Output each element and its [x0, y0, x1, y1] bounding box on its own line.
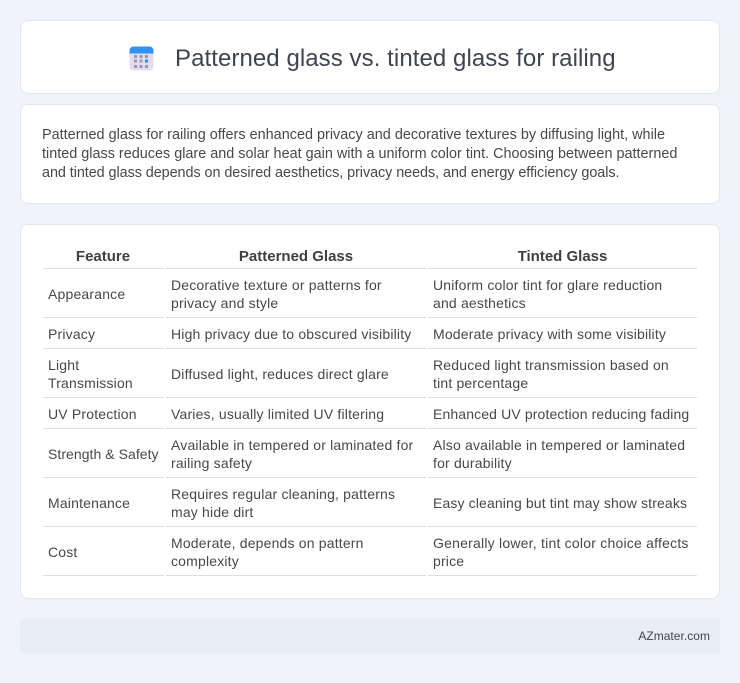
text: High privacy due to obscured visibility [171, 326, 411, 342]
text: Strength & Safety [48, 446, 159, 462]
text: for durability [433, 455, 512, 471]
text: tint percentage [433, 375, 528, 391]
row: privacy [48, 326, 666, 342]
text: price [433, 553, 464, 569]
text: Tinted Glass [518, 248, 607, 265]
text: Privacy [48, 326, 95, 342]
text: may hide dirt [171, 504, 254, 520]
row: maintenance [48, 486, 687, 520]
text: Feature [76, 248, 130, 265]
comparison table [43, 248, 697, 576]
intro paragraph [42, 126, 677, 181]
text: Appearance [48, 286, 125, 302]
text: and aesthetics [433, 295, 526, 311]
text: UV Protection [48, 406, 137, 422]
text: Also available in tempered or laminated [433, 437, 685, 453]
row: light transmission [48, 357, 669, 391]
text: Uniform color tint for glare reduction [433, 277, 662, 293]
text: Generally lower, tint color choice affects [433, 535, 689, 551]
text: Requires regular cleaning, patterns [171, 486, 395, 502]
text: Moderate privacy with some visibility [433, 326, 666, 342]
text: Available in tempered or laminated for [171, 437, 413, 453]
text: Cost [48, 544, 78, 560]
text: Decorative texture or patterns for [171, 277, 382, 293]
text: Maintenance [48, 495, 130, 511]
text: Transmission [48, 375, 133, 391]
row: cost [48, 535, 689, 569]
text: privacy and style [171, 295, 278, 311]
intro paragraph: and tinted glass depends on desired aesthetics, privacy needs, and energy efficiency goals. [42, 165, 619, 181]
text: complexity [171, 553, 239, 569]
row: uv protection [48, 406, 689, 422]
table header [76, 248, 607, 265]
title: Patterned glass vs. tinted glass for railing [175, 45, 616, 72]
text: railing safety [171, 455, 252, 471]
text: Patterned Glass [239, 248, 353, 265]
text: Light [48, 357, 79, 373]
comparison table panel [20, 224, 720, 599]
row: strength and safety [48, 437, 685, 471]
intro paragraph: tinted glass reduces glare and solar heat gain with a uniform color tint. Choosing between patterned [42, 146, 677, 162]
text: Diffused light, reduces direct glare [171, 366, 389, 382]
text: Varies, usually limited UV filtering [171, 406, 384, 422]
text: Enhanced UV protection reducing fading [433, 406, 689, 422]
text: Moderate, depends on pattern [171, 535, 364, 551]
footer credit: AZmater.com [638, 629, 710, 643]
row: appearance [48, 277, 662, 311]
intro text panel [20, 104, 720, 204]
text: Easy cleaning but tint may show streaks [433, 495, 687, 511]
icon: calendar [130, 46, 154, 70]
footer bar [20, 619, 720, 653]
intro paragraph: Patterned glass for railing offers enhanced privacy and decorative textures by diffusing light, while [42, 126, 665, 142]
text: Reduced light transmission based on [433, 357, 669, 373]
header panel [20, 20, 720, 94]
